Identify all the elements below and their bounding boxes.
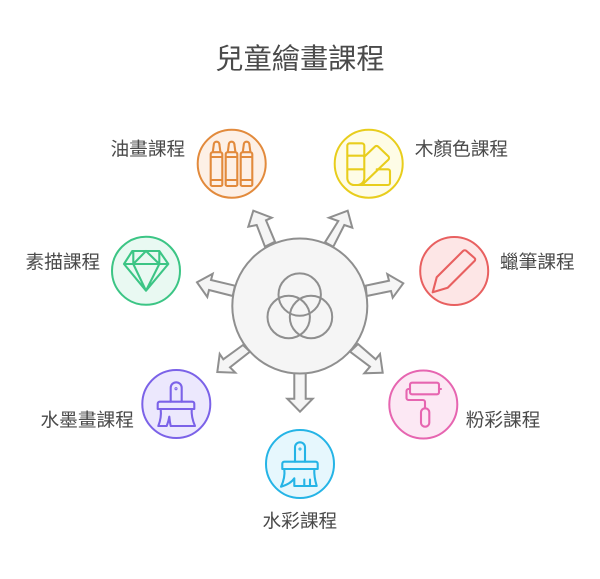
arrow: to crayon bbox=[366, 274, 403, 298]
central hub with overlapping circles bbox=[232, 238, 367, 374]
node: sketch diamond icon bbox=[112, 237, 180, 305]
label: sketch: 素描課程 bbox=[26, 251, 100, 272]
arrow: to sketch bbox=[197, 274, 235, 297]
arrow: to pastel bbox=[350, 344, 383, 373]
title: 兒童繪畫課程 bbox=[215, 42, 385, 74]
node: oil painting crayons icon bbox=[198, 130, 266, 198]
arrow: to ink painting bbox=[217, 345, 250, 373]
arrow: to colored pencil bbox=[325, 211, 352, 247]
node: pastel roller icon bbox=[389, 370, 457, 438]
node: colored pencil swatch icon bbox=[335, 130, 403, 198]
label: watercolor: 水彩課程 bbox=[262, 510, 337, 531]
label: colored pencil: 木顏色課程 bbox=[415, 138, 508, 159]
node: crayon pencil icon bbox=[420, 237, 488, 305]
node: ink painting brush icon bbox=[142, 370, 210, 438]
arrow: to watercolor bbox=[287, 373, 313, 412]
label: oil painting: 油畫課程 bbox=[110, 138, 185, 159]
node: watercolor brush icon bbox=[266, 430, 334, 498]
label: pastel: 粉彩課程 bbox=[466, 409, 540, 430]
label: crayon: 蠟筆課程 bbox=[500, 251, 575, 272]
arrow: to oil painting bbox=[248, 211, 275, 247]
label: ink painting: 水墨畫課程 bbox=[40, 409, 134, 430]
